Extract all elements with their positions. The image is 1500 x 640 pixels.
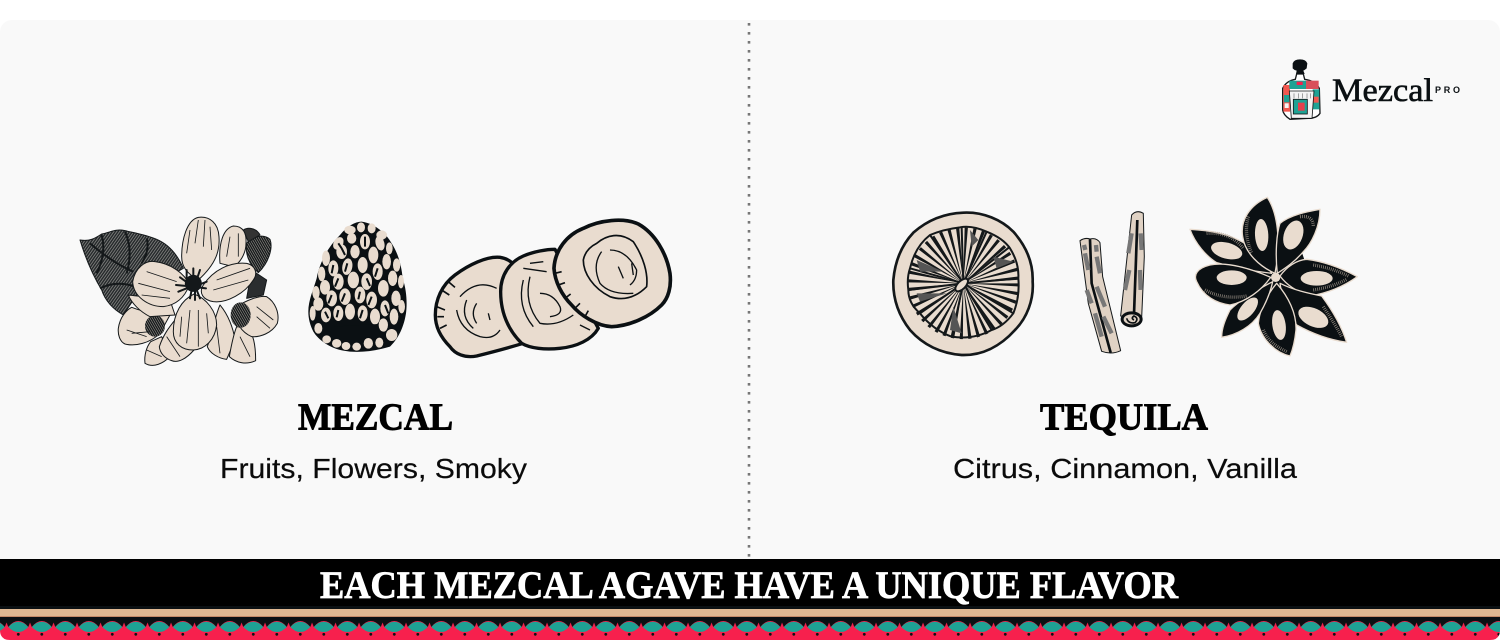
icon: raspberry	[308, 222, 407, 352]
panel: mezcal	[80, 217, 670, 484]
heading: tequila: TEQUILA	[1040, 396, 1209, 438]
logo: mezcal pro	[1283, 59, 1460, 119]
dotted divider	[748, 23, 750, 558]
text: tequila flavors: Citrus, Cinnamon, Vanilla	[953, 453, 1297, 484]
banner title: EACH MEZCAL AGAVE HAVE A UNIQUE FLAVOR	[320, 564, 1179, 607]
icon: flower	[80, 217, 278, 365]
banner	[0, 559, 1500, 640]
logo suffix: PRO	[1435, 85, 1460, 95]
panel: tequila	[893, 197, 1357, 484]
icon: citrus slice	[893, 213, 1033, 355]
icon: star anise	[1190, 197, 1357, 356]
icon: smoked slices	[435, 220, 670, 357]
icon: cinnamon sticks	[1080, 212, 1144, 353]
heading: mezcal: MEZCAL	[298, 396, 453, 438]
icon: bottle	[1283, 59, 1320, 119]
text: mezcal flavors: Fruits, Flowers, Smoky	[220, 453, 527, 484]
banner pattern	[0, 620, 1500, 640]
logo wordmark: Mezcal	[1332, 73, 1433, 109]
